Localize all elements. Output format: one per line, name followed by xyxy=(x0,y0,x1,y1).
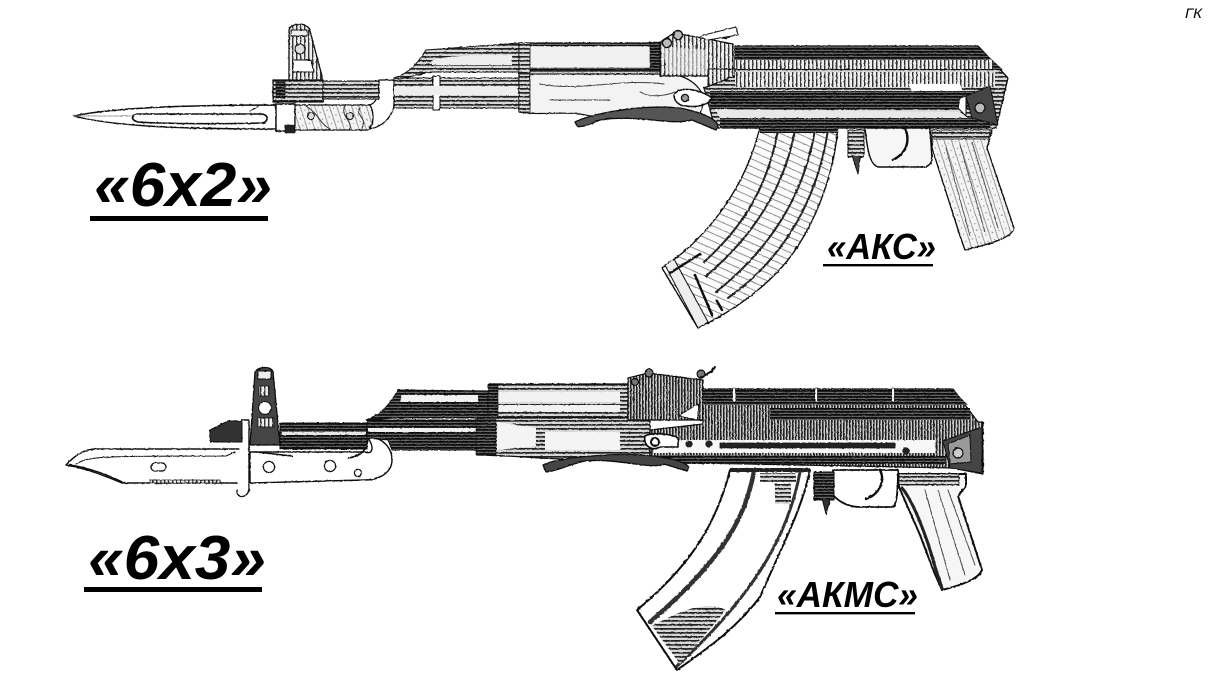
rear sight xyxy=(628,367,715,420)
trigger guard xyxy=(814,470,898,514)
handguard xyxy=(519,42,704,116)
gas tube xyxy=(366,390,490,420)
label: AKS: «АКС» xyxy=(827,226,936,267)
handguard xyxy=(476,384,650,459)
barrel xyxy=(280,423,367,449)
rear sight xyxy=(660,27,738,91)
folded stock lever xyxy=(575,89,718,130)
barrel xyxy=(323,81,379,99)
magazine xyxy=(637,468,810,670)
bayonet 6x3 xyxy=(66,420,392,496)
muzzle and front sight xyxy=(210,368,280,445)
receiver xyxy=(704,46,1008,128)
rifle: AKS with bayonet xyxy=(74,24,1014,328)
front sight xyxy=(273,24,323,102)
gas tube xyxy=(394,43,520,79)
pistol grip xyxy=(932,130,1014,250)
folded stock lever xyxy=(543,434,689,472)
receiver xyxy=(650,388,983,474)
pistol grip xyxy=(899,474,982,590)
trigger guard xyxy=(848,128,932,174)
bayonet 6x2 xyxy=(74,80,394,133)
label: bayonet 6x2: «6х2» xyxy=(94,151,272,220)
label: bayonet 6x3: «6х3» xyxy=(88,524,266,593)
rifle: AKMS with bayonet xyxy=(66,367,983,670)
magazine xyxy=(662,127,838,328)
author mark: ГК xyxy=(1185,5,1203,21)
label: AKMS: «АКМС» xyxy=(777,574,918,615)
